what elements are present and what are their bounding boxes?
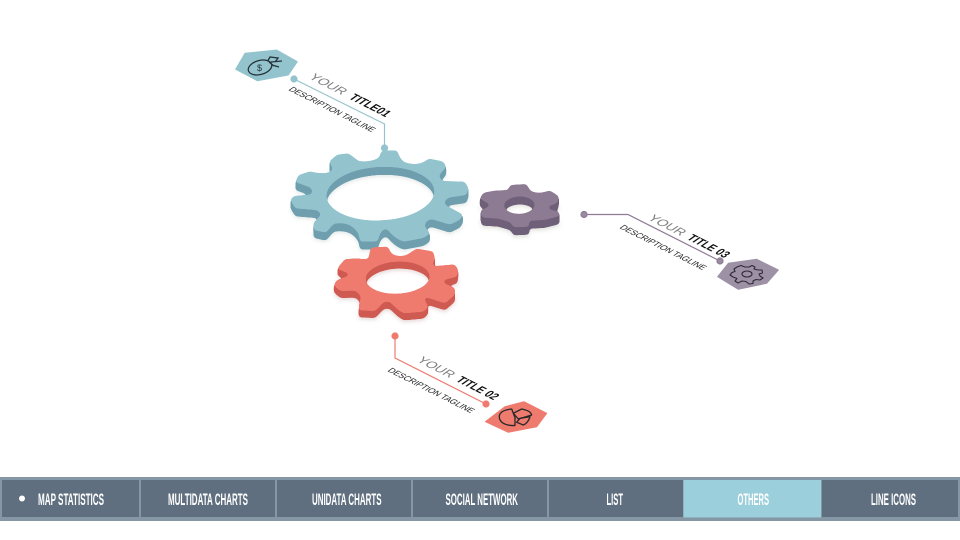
connector: title 02 [392, 333, 489, 407]
gear: blue large gear [291, 151, 468, 250]
tagline: title 02: DESCRIPTION TAGLINE [385, 366, 478, 415]
nav labels: LIST [606, 490, 623, 509]
label: title 03 [644, 213, 734, 260]
hexagon icon: money bag [236, 50, 297, 81]
tagline: title 01: DESCRIPTION TAGLINE [286, 85, 379, 134]
nav labels: MULTIDATA CHARTS [168, 490, 248, 509]
label: title 02: YOUR [413, 355, 459, 380]
active tab: others [684, 480, 821, 518]
label: title 01 [305, 72, 395, 119]
connector: title 01 [291, 76, 388, 151]
label: title 03: TITLE 03 [684, 232, 734, 260]
label: title 01: TITLE01 [346, 92, 395, 119]
tagline: title 03: DESCRIPTION TAGLINE [617, 223, 710, 272]
label: title 02: TITLE 02 [453, 374, 503, 402]
gear: coral medium gear [334, 247, 458, 321]
nav labels: MAP STATISTICS [38, 490, 104, 509]
gear: purple small gear [480, 185, 559, 237]
nav labels: OTHERS [738, 490, 769, 509]
nav labels [38, 490, 916, 509]
hexagon icon: money bag: $ [257, 63, 262, 73]
navigation bar [0, 477, 960, 521]
connector: title 03 [581, 212, 723, 264]
nav bullet [19, 496, 25, 502]
label: title 02 [413, 355, 503, 402]
nav labels: UNIDATA CHARTS [312, 490, 382, 509]
label: title 01: YOUR [305, 72, 351, 97]
nav labels: SOCIAL NETWORK [446, 490, 518, 509]
label: title 03: YOUR [644, 213, 690, 238]
hexagon icon: pie chart [486, 402, 547, 432]
hexagon icon: gear [718, 259, 778, 289]
